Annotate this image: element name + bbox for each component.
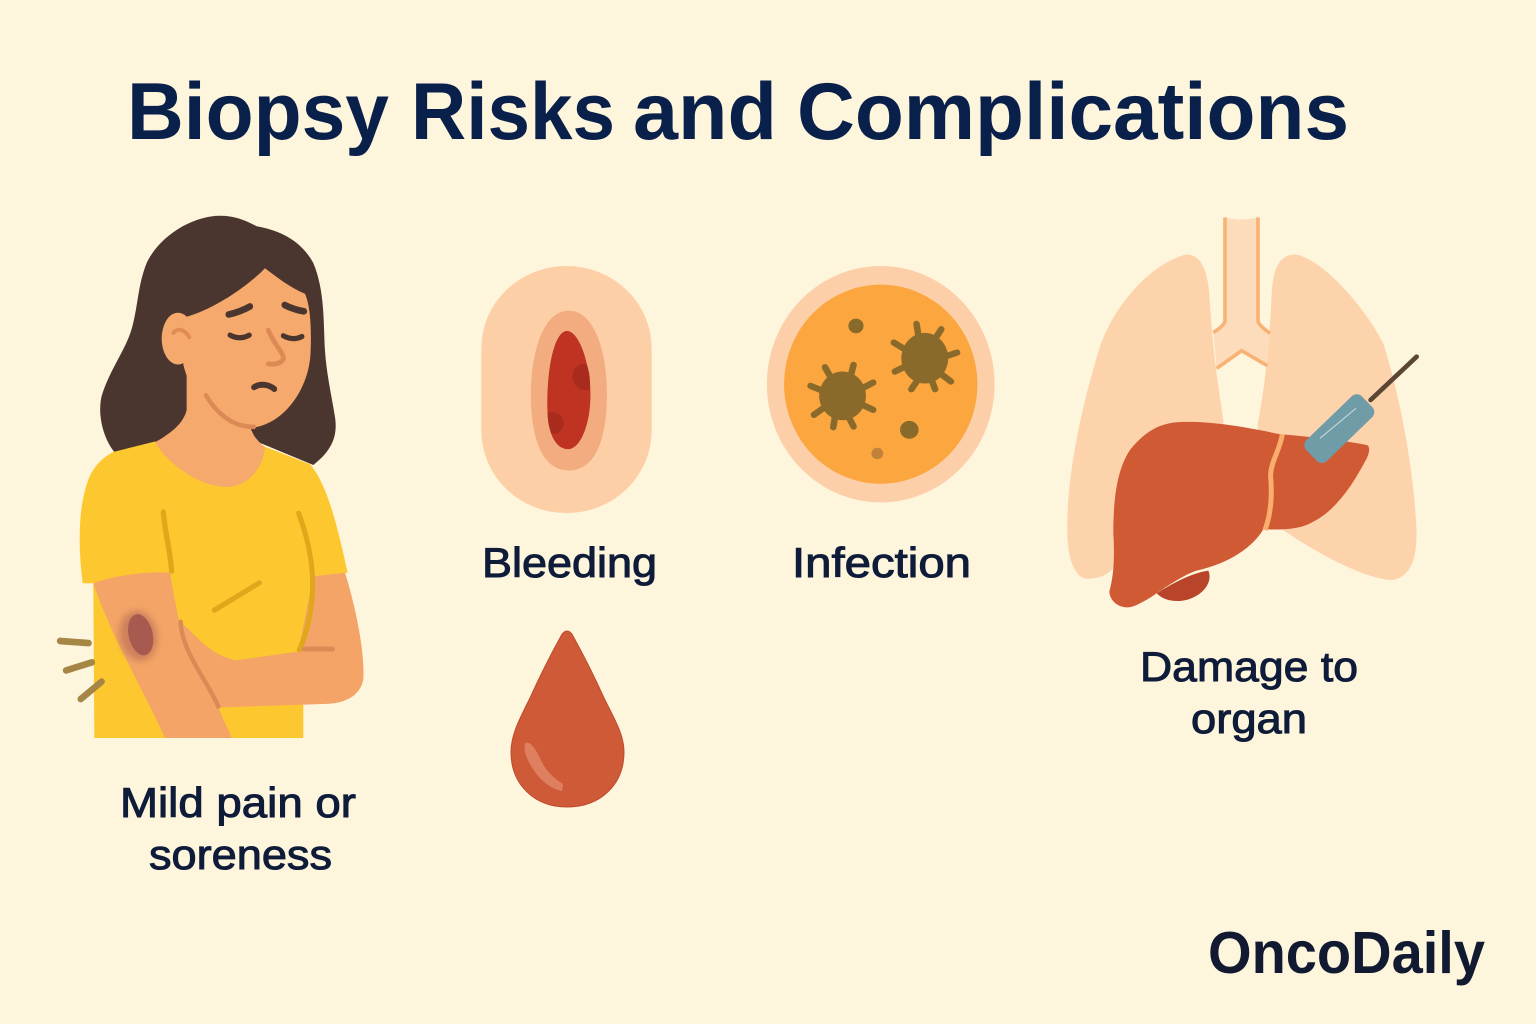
label: mild pain: Mild pain or	[120, 779, 356, 826]
ear	[162, 313, 194, 364]
needle handle	[1301, 391, 1377, 466]
neck and chest	[150, 361, 270, 494]
lungs	[1067, 254, 1417, 580]
title: Biopsy	[127, 67, 389, 157]
label: mild pain	[120, 779, 356, 878]
liver ligament	[1265, 434, 1282, 530]
title: Risks	[411, 67, 615, 157]
label: mild pain: soreness	[149, 831, 332, 878]
title	[127, 67, 1349, 157]
label: infection: Infection	[792, 539, 971, 586]
face	[183, 268, 311, 428]
virus left	[811, 365, 873, 427]
label: damage to organ	[1140, 643, 1358, 742]
title: and	[633, 67, 777, 157]
icon: blood drop	[511, 631, 624, 807]
bacteria dots	[848, 319, 919, 459]
arms	[93, 572, 364, 738]
label: damage to organ: Damage to	[1140, 643, 1358, 690]
label: damage to organ: organ	[1191, 695, 1307, 742]
brand logo: OncoDaily	[1208, 920, 1485, 986]
clothing and skin fold lines	[163, 330, 333, 706]
title: Complications	[797, 67, 1349, 157]
pain marks	[60, 641, 102, 699]
hair	[100, 216, 336, 465]
illustration: infection	[767, 266, 995, 502]
trachea	[1213, 217, 1270, 368]
illustration: lungs, liver and biopsy needle	[1067, 217, 1417, 607]
illustration: woman with sore arm	[60, 216, 364, 738]
liver	[1109, 422, 1369, 607]
gallbladder	[1157, 571, 1210, 601]
eyes, brows and mouth	[229, 305, 304, 389]
shirt	[80, 442, 348, 738]
label: bleeding: Bleeding	[482, 539, 657, 586]
illustration: bleeding wound	[481, 266, 652, 513]
bruise	[115, 607, 162, 664]
virus right	[894, 324, 957, 389]
needle shaft	[1371, 357, 1417, 400]
